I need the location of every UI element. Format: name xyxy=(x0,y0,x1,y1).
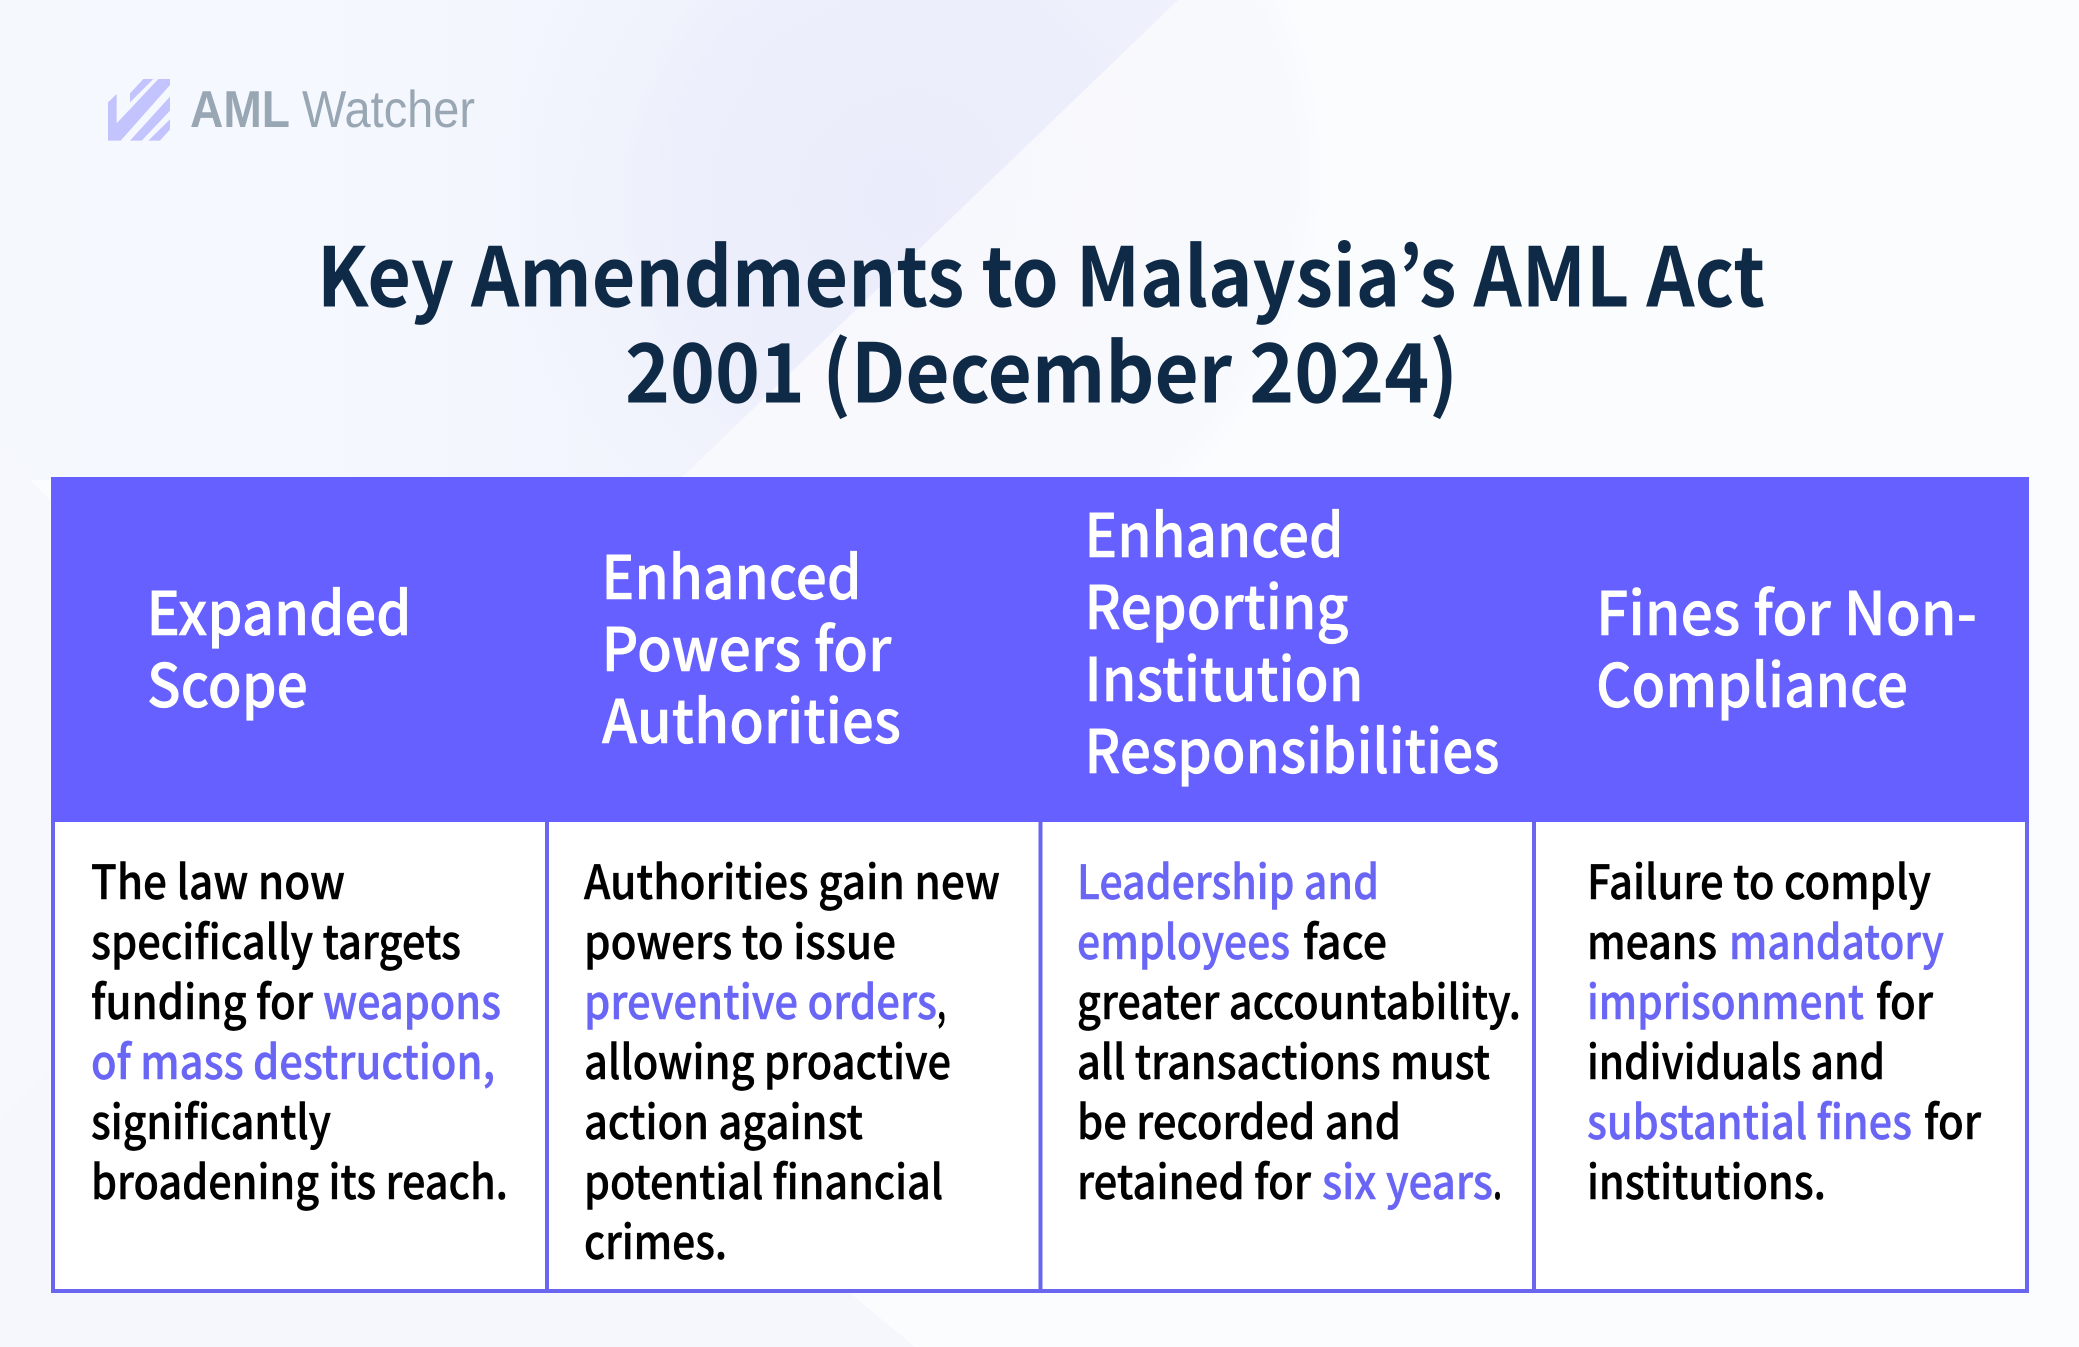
heading: Enhanced Reporting Institution Responsibilities: Enhanced xyxy=(1084,488,1344,575)
text block: Fines description: for xyxy=(1876,964,1934,1033)
text block: Enhanced Powers description: crimes. xyxy=(584,1204,727,1273)
table body xyxy=(53,820,2027,1291)
title xyxy=(317,212,1765,426)
heading: Fines for Non-Compliance: Fines for Non- xyxy=(1596,566,1977,653)
text block: Expanded Scope description: funding for xyxy=(91,964,314,1033)
logo xyxy=(108,79,475,141)
text block: Fines description: substantial fines xyxy=(1587,1084,1912,1153)
text block: Fines description: individuals and xyxy=(1587,1024,1885,1093)
heading: Enhanced Reporting Institution Responsibilities: Responsibilities xyxy=(1084,704,1500,791)
text block: Reporting Institution description: Leadership and xyxy=(1077,844,1379,913)
text block: Fines description: imprisonment xyxy=(1587,964,1864,1033)
text block: Expanded Scope description: of mass destruction, xyxy=(91,1024,495,1093)
text block: Enhanced Powers description: preventive orders xyxy=(584,964,937,1033)
heading: Enhanced Powers for Authorities xyxy=(602,530,901,761)
text block: Reporting Institution description: six years xyxy=(1322,1144,1493,1213)
heading: Enhanced Powers for Authorities: Enhanced xyxy=(602,530,862,617)
text block: Expanded Scope description xyxy=(91,844,508,1213)
text block: Reporting Institution description: retained for xyxy=(1077,1144,1312,1213)
text block: Expanded Scope description: significantly xyxy=(91,1084,331,1153)
text block: Reporting Institution description: face xyxy=(1303,904,1387,973)
text block: Fines description: for xyxy=(1924,1084,1982,1153)
heading: Expanded Scope xyxy=(146,566,412,725)
icon: logo mark xyxy=(108,79,170,141)
text block: Enhanced Powers description: potential financial xyxy=(584,1144,943,1213)
text block: Enhanced Powers description: powers to issue xyxy=(584,904,896,973)
heading: Enhanced Reporting Institution Responsibilities: Reporting xyxy=(1084,560,1348,647)
logo wordmark: AML xyxy=(190,81,290,139)
text block: Reporting Institution description: employees xyxy=(1077,904,1290,973)
text block: Expanded Scope description: specifically targets xyxy=(91,904,461,973)
text block: Fines description: means xyxy=(1587,904,1717,973)
text block: Fines description: Failure to comply xyxy=(1587,844,1931,913)
text block: Expanded Scope description: The law now xyxy=(91,844,345,913)
heading: Fines for Non-Compliance xyxy=(1596,566,1977,725)
title: 2001 (December 2024) xyxy=(625,308,1458,426)
text block: Enhanced Powers description: Authorities gain new xyxy=(584,844,1000,913)
panel: amendments table xyxy=(51,477,2029,1291)
heading: Enhanced Powers for Authorities: Powers for xyxy=(602,602,892,689)
heading: Expanded Scope: Expanded xyxy=(146,566,412,653)
text block: Reporting Institution description: all transactions must xyxy=(1077,1024,1490,1093)
table header bar xyxy=(51,477,2029,822)
heading: Enhanced Reporting Institution Responsibilities: Institution xyxy=(1084,632,1364,719)
heading: Enhanced Reporting Institution Responsibilities xyxy=(1084,488,1500,791)
logo wordmark xyxy=(190,81,475,139)
text block: Expanded Scope description: weapons xyxy=(323,964,501,1033)
heading: Fines for Non-Compliance: Compliance xyxy=(1596,638,1908,725)
text block: Enhanced Powers description: , xyxy=(937,964,946,1033)
logo wordmark: Watcher xyxy=(302,81,475,139)
text block: Fines description: institutions. xyxy=(1587,1144,1826,1213)
heading: Enhanced Powers for Authorities: Authorities xyxy=(602,674,901,761)
text block: Enhanced Powers description: allowing proactive xyxy=(584,1024,951,1093)
text block: Reporting Institution description: be recorded and xyxy=(1077,1084,1401,1153)
text block: Expanded Scope description: broadening its reach. xyxy=(91,1144,508,1213)
text block: Enhanced Powers description xyxy=(584,844,1000,1273)
title: Key Amendments to Malaysia’s AML Act xyxy=(317,212,1765,330)
text block: Reporting Institution description: greater accountability. xyxy=(1077,964,1521,1033)
text block: Reporting Institution description: . xyxy=(1493,1144,1502,1213)
heading: Expanded Scope: Scope xyxy=(147,638,308,725)
text block: Fines description: mandatory xyxy=(1729,904,1944,973)
text block: Reporting Institution description xyxy=(1077,844,1521,1213)
text block: Enhanced Powers description: action against xyxy=(584,1084,863,1153)
text block: Fines description xyxy=(1587,844,1982,1213)
